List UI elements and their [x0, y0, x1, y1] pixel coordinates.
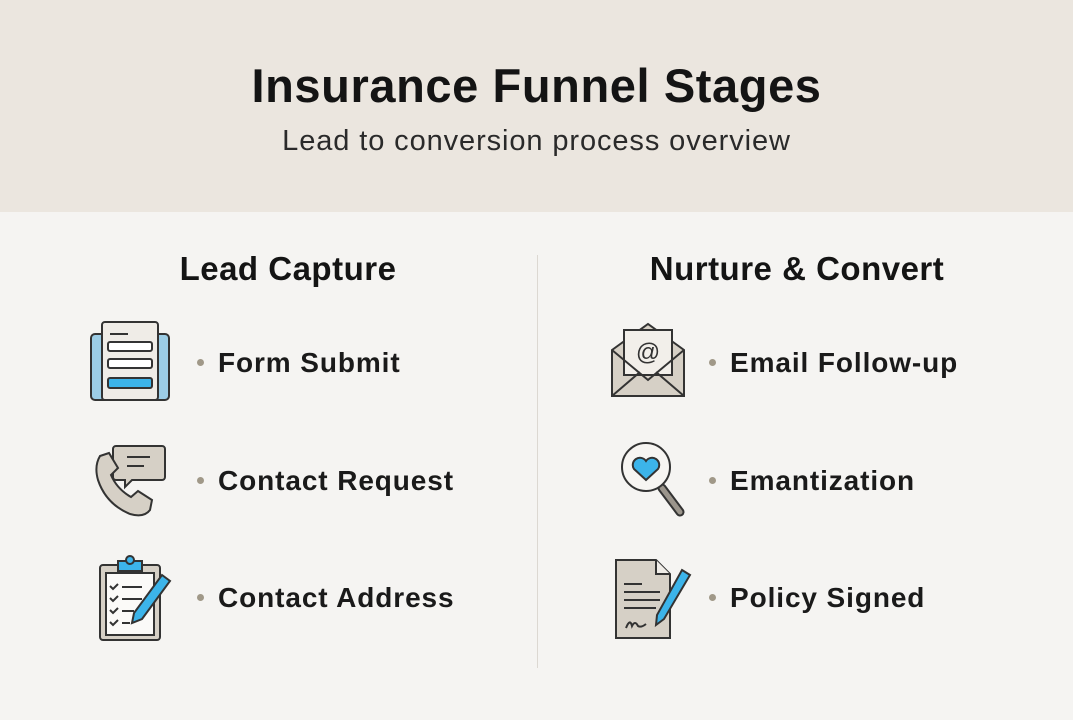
heading: Lead Capture: Lead Capture — [180, 250, 396, 287]
icon: email envelope: @ — [636, 339, 660, 366]
subtitle: Lead to conversion process overview — [282, 125, 791, 157]
icon: form — [90, 321, 170, 401]
icon: phone chat — [95, 445, 166, 516]
icon: email envelope — [611, 322, 685, 397]
heading: Nurture & Convert: Nurture & Convert — [650, 250, 944, 287]
icon: magnifier heart — [621, 442, 684, 516]
icon: clipboard — [99, 555, 172, 641]
title: Insurance Funnel Stages — [251, 59, 822, 112]
item: Policy Signed: Policy Signed — [730, 582, 925, 613]
item: Contact Request: Contact Request — [218, 465, 454, 496]
icon: signed policy — [615, 559, 692, 639]
item: Form Submit: Form Submit — [218, 347, 401, 378]
item: Contact Address: Contact Address — [218, 582, 455, 613]
item: Email Follow-up: Email Follow-up — [730, 347, 958, 378]
header band — [0, 0, 1073, 212]
item: Emantization: Emantization — [730, 465, 915, 496]
